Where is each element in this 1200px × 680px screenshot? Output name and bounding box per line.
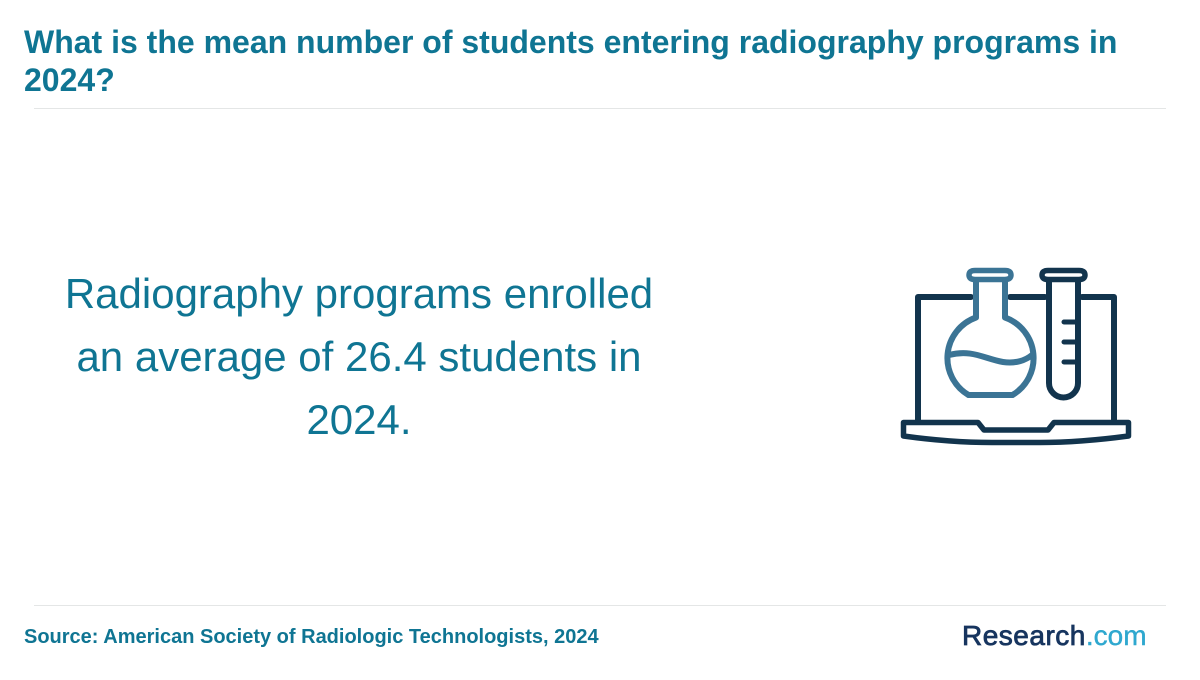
source: Source: American Society of Radiologic Technologists, 2024 <box>24 626 599 648</box>
laptop screen <box>918 297 1114 420</box>
test tube <box>1042 270 1085 398</box>
laptop base <box>904 422 1128 442</box>
main statement: Radiography programs enrolled an average of 26.4 students in 2024. <box>65 270 653 443</box>
title: What is the mean number of students entering radiography programs in 2024? <box>24 24 1117 98</box>
logo: Research.com <box>962 620 1147 651</box>
icon: laptop with flask and test tube <box>900 268 1132 446</box>
flask <box>947 270 1034 395</box>
